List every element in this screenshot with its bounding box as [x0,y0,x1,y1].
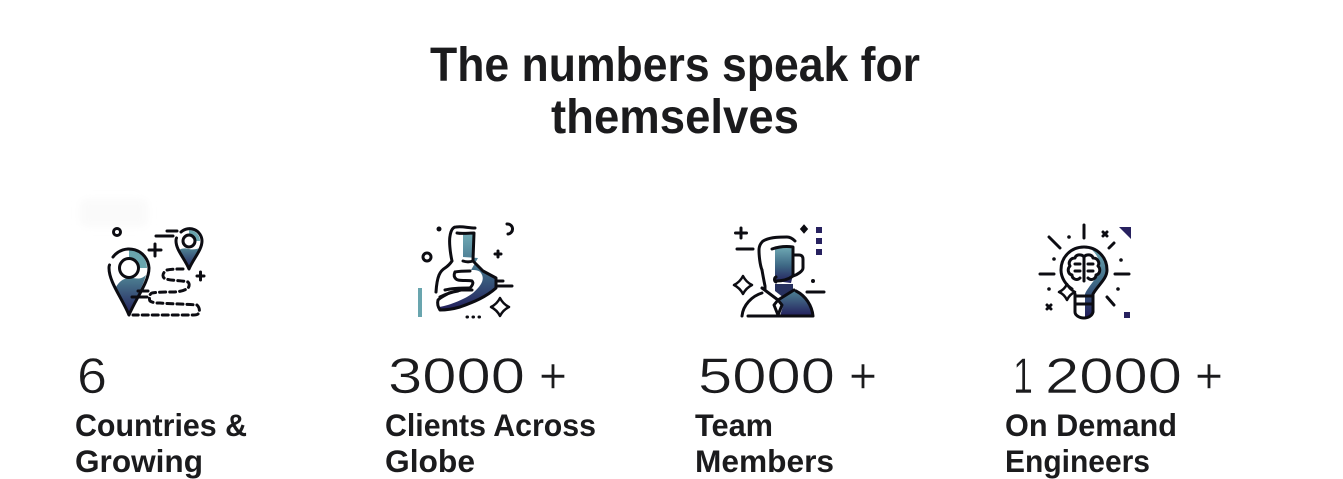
number: 12000 +: 2000 [1045,348,1182,404]
title: themselves [551,91,799,144]
number: 5000 +: 5000 [698,348,835,404]
label: clients across globe [385,407,596,479]
label: team members: Members [695,443,834,479]
number: 12000 + [1013,348,1223,404]
number: 3000 +: 3000 [388,348,525,404]
number: 5000 +: + [849,348,877,404]
icon: light bulb with brain [1040,225,1131,318]
number: 3000 +: + [539,348,567,404]
label: on demand engineers: On Demand [1005,407,1177,443]
icon: map pins with dashed route [80,199,204,315]
label: on demand engineers: Engineers [1005,443,1150,479]
label: clients across globe: Clients Across [385,407,596,443]
label: on demand engineers [1005,407,1177,479]
stat: clients [385,224,596,479]
label: countries and growing [75,407,247,479]
label: team members [695,407,834,479]
icon: person with open hand [418,224,513,317]
label: team members: Team [695,407,773,443]
number: 5000 + [698,348,877,404]
stat: countries [75,199,247,479]
stat: engineers [1005,225,1223,479]
label: clients across globe: Globe [385,443,475,479]
icon: headset agent [734,225,824,316]
number: 6: 6 [77,348,107,404]
title [430,39,920,144]
number: 3000 + [388,348,567,404]
label: countries and growing: Growing [75,443,203,479]
label: countries and growing: Countries & [75,407,247,443]
title: The numbers speak for [430,39,920,92]
number: 12000 +: + [1195,348,1223,404]
stat: team [695,225,877,479]
number: 12000 +: 1 [1013,348,1033,404]
